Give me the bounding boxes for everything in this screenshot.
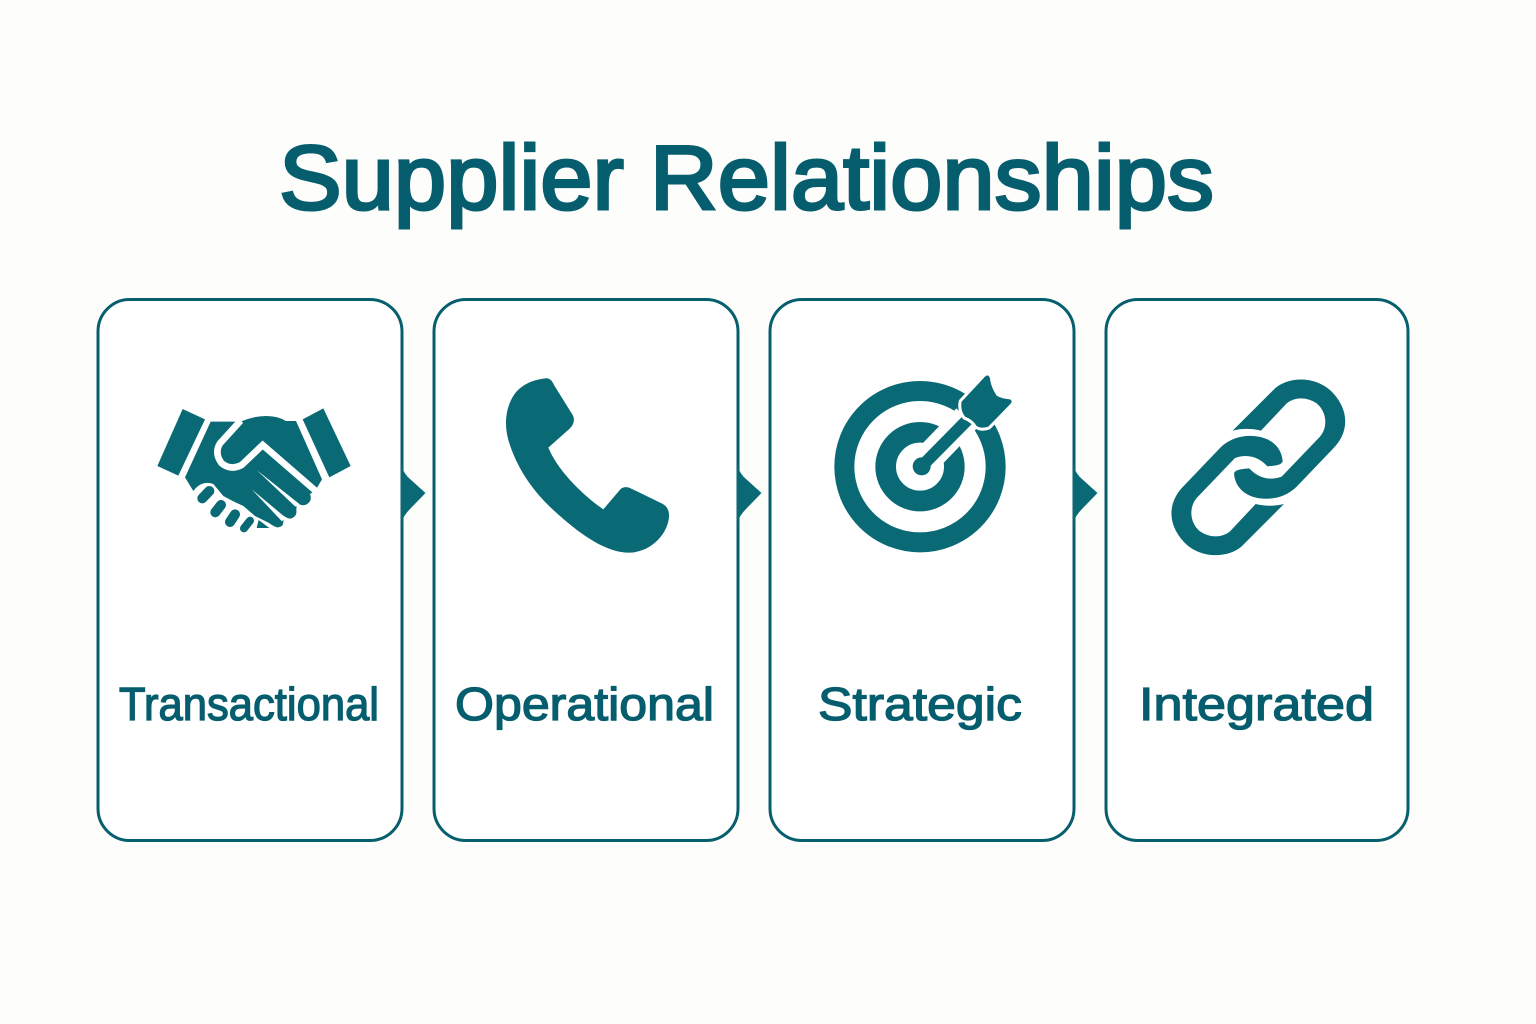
arrow: operational to strategic [737, 465, 762, 523]
card outline: strategic [770, 300, 1074, 840]
panel: strategic [770, 300, 1074, 840]
label: transactional: Transactional [119, 678, 379, 730]
label: strategic: Strategic [818, 678, 1022, 730]
label: integrated: Integrated [1139, 678, 1374, 730]
card outline: transactional [98, 300, 402, 840]
icon: phone [506, 378, 669, 553]
arrow: strategic to integrated [1073, 465, 1098, 523]
panel: integrated [1106, 300, 1408, 840]
arrow: transactional to operational [401, 465, 426, 523]
icon: handshake [157, 408, 351, 528]
panel: operational [434, 300, 738, 840]
card outline: integrated [1106, 300, 1408, 840]
icon: chain link [1171, 380, 1345, 555]
panel: transactional [98, 300, 402, 840]
title: Supplier Relationships [279, 128, 1214, 229]
card outline: operational [434, 300, 738, 840]
label: operational: Operational [455, 678, 714, 730]
icon: target with arrow [844, 375, 1012, 542]
